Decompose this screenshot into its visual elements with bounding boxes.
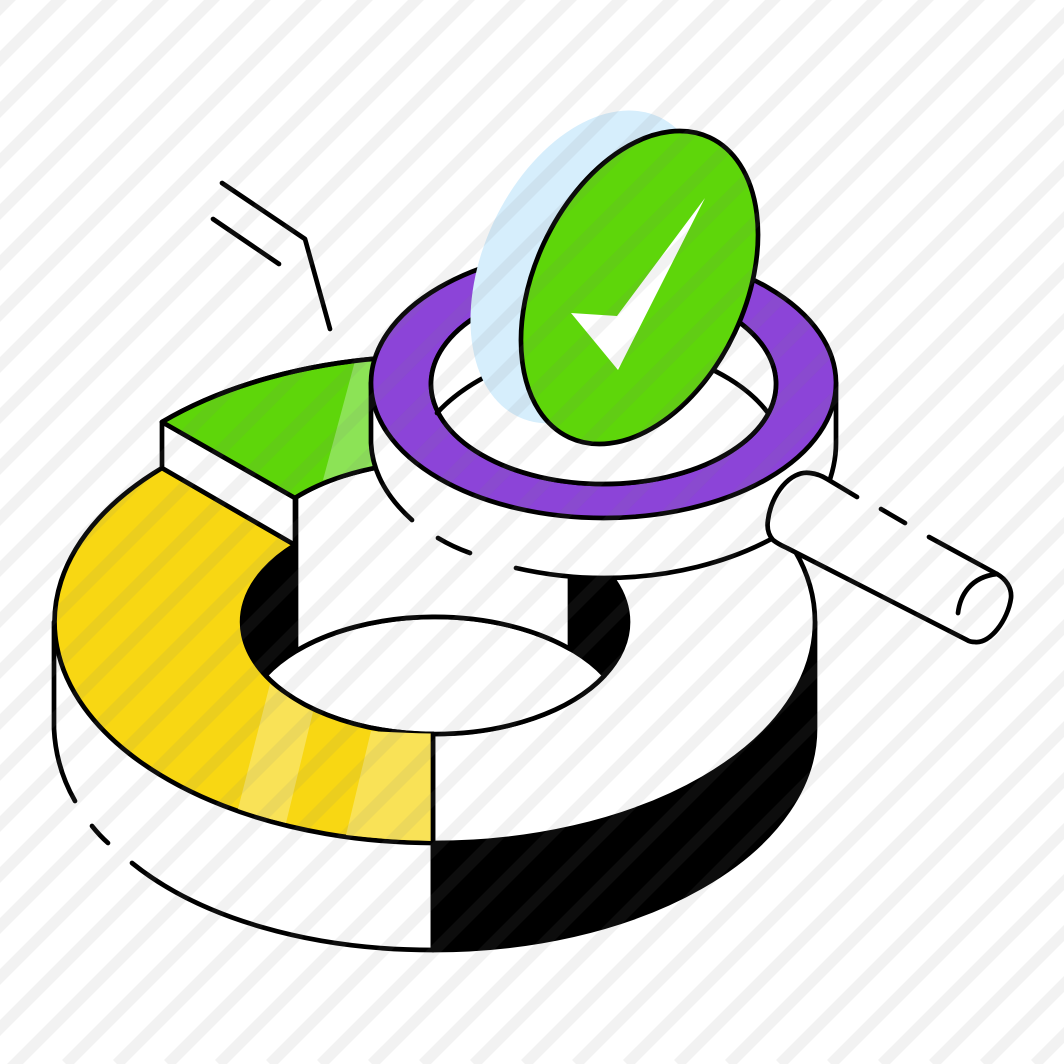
donut outer side: black segment [433, 622, 815, 950]
lens rim: white side [371, 383, 836, 578]
decorative accent lines [213, 183, 330, 329]
green segment highlight [323, 357, 400, 480]
lens glass [431, 284, 776, 484]
coin shadow [423, 72, 755, 462]
divider between yellow and white segments [431, 734, 435, 843]
donut top face: white base [433, 500, 815, 843]
donut outer side: white segment [54, 622, 433, 950]
handle [768, 473, 1011, 642]
lens ring: purple [371, 248, 836, 518]
donut chart [54, 72, 1011, 950]
donut hole: see-through floor [265, 617, 605, 734]
raised green segment [162, 357, 400, 498]
raised segment: inner white wall [296, 498, 570, 651]
donut hole: dark inner wall [242, 510, 628, 734]
yellow segment [55, 468, 433, 843]
magnifying glass [371, 248, 1011, 642]
green check coin [474, 93, 805, 482]
raised segment: white end wall [162, 422, 295, 545]
icon: white check mark [571, 198, 705, 370]
lens inner rim line [437, 352, 768, 413]
yellow segment highlights [238, 684, 431, 841]
lens rim: stroke pieces [371, 383, 836, 578]
